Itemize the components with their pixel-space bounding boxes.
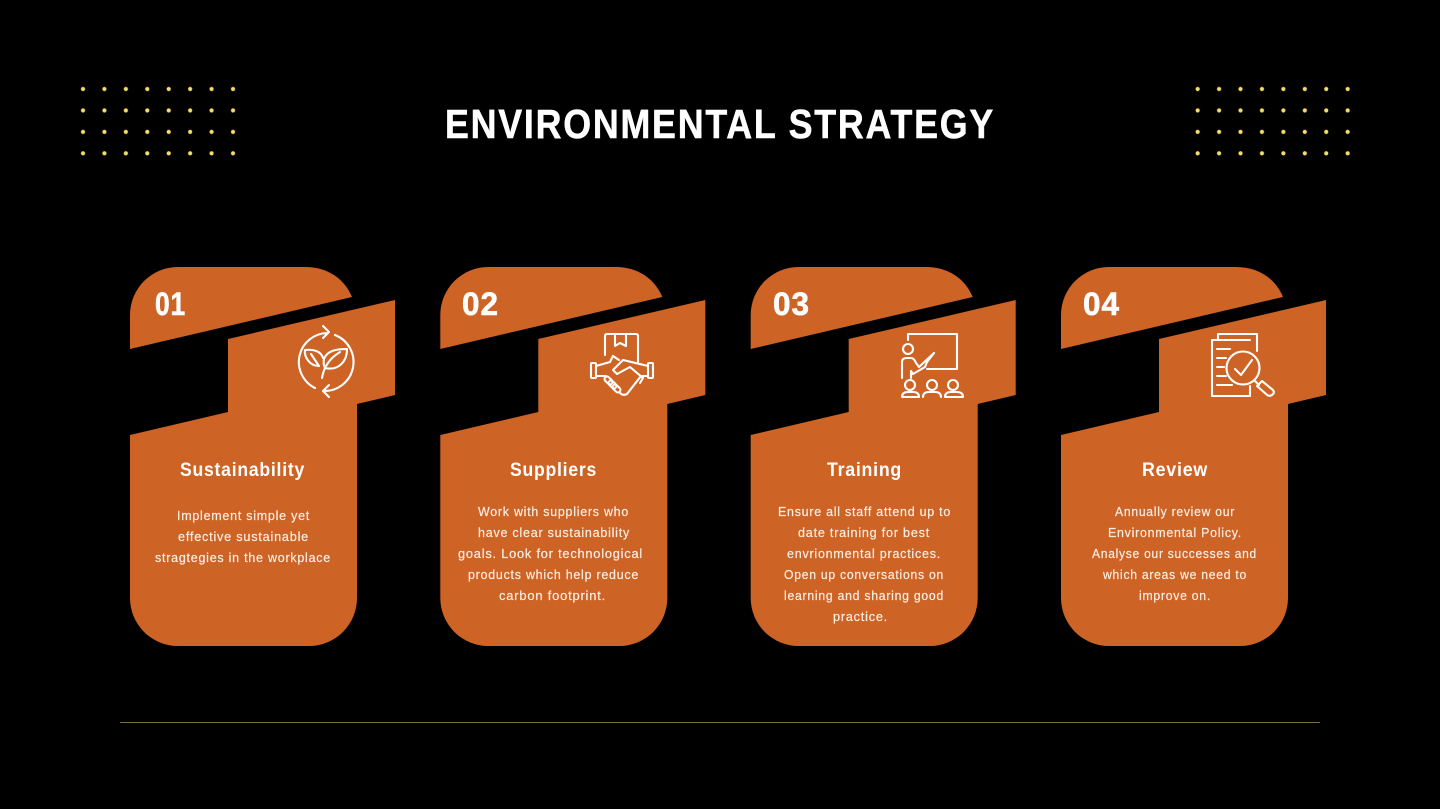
description: products which help reduce (468, 567, 639, 582)
description: practice. (833, 609, 888, 624)
description: carbon footprint. (499, 588, 606, 603)
panel: 01 Sustainability (130, 267, 395, 646)
description: learning and sharing good (784, 588, 944, 603)
description: goals. Look for technological (458, 546, 643, 561)
description (155, 508, 331, 565)
description: envrionmental practices. (787, 546, 941, 561)
description: have clear sustainability (478, 525, 630, 540)
description: which areas we need to (1102, 567, 1247, 582)
heading: Training (827, 460, 902, 481)
panel: 04 Review (1061, 267, 1326, 646)
panel: 02 Suppliers (440, 267, 705, 646)
description: date training for best (798, 525, 930, 540)
heading: Review (1142, 460, 1208, 481)
description: improve on. (1139, 588, 1211, 603)
icon: handshake and box (591, 334, 653, 395)
number 01: 01 (155, 286, 186, 322)
description: Implement simple yet (177, 508, 310, 523)
panel: 03 Training (751, 267, 1016, 646)
number 03: 03 (773, 286, 810, 322)
description: Analyse our successes and (1092, 546, 1257, 561)
heading: Sustainability (180, 460, 305, 481)
number 04: 04 (1083, 286, 1120, 322)
title: ENVIRONMENTAL STRATEGY (445, 101, 995, 147)
description (778, 504, 951, 624)
icon: recycling leaves (299, 326, 354, 397)
description: stragtegies in the workplace (155, 550, 331, 565)
bottom rule (120, 722, 1320, 723)
description: Work with suppliers who (478, 504, 629, 519)
icon: trainer at board (902, 334, 963, 397)
description: Ensure all staff attend up to (778, 504, 951, 519)
decorative dots: top left (72, 78, 244, 164)
description: Environmental Policy. (1108, 525, 1242, 540)
heading: Suppliers (510, 460, 597, 481)
description: Annually review our (1115, 504, 1235, 519)
description (458, 504, 643, 603)
icon: document review magnifier (1212, 334, 1274, 396)
description: effective sustainable (178, 529, 309, 544)
description: Open up conversations on (784, 567, 944, 582)
decorative dots: top right (1186, 78, 1358, 164)
number 02: 02 (462, 286, 499, 322)
description (1092, 504, 1257, 603)
